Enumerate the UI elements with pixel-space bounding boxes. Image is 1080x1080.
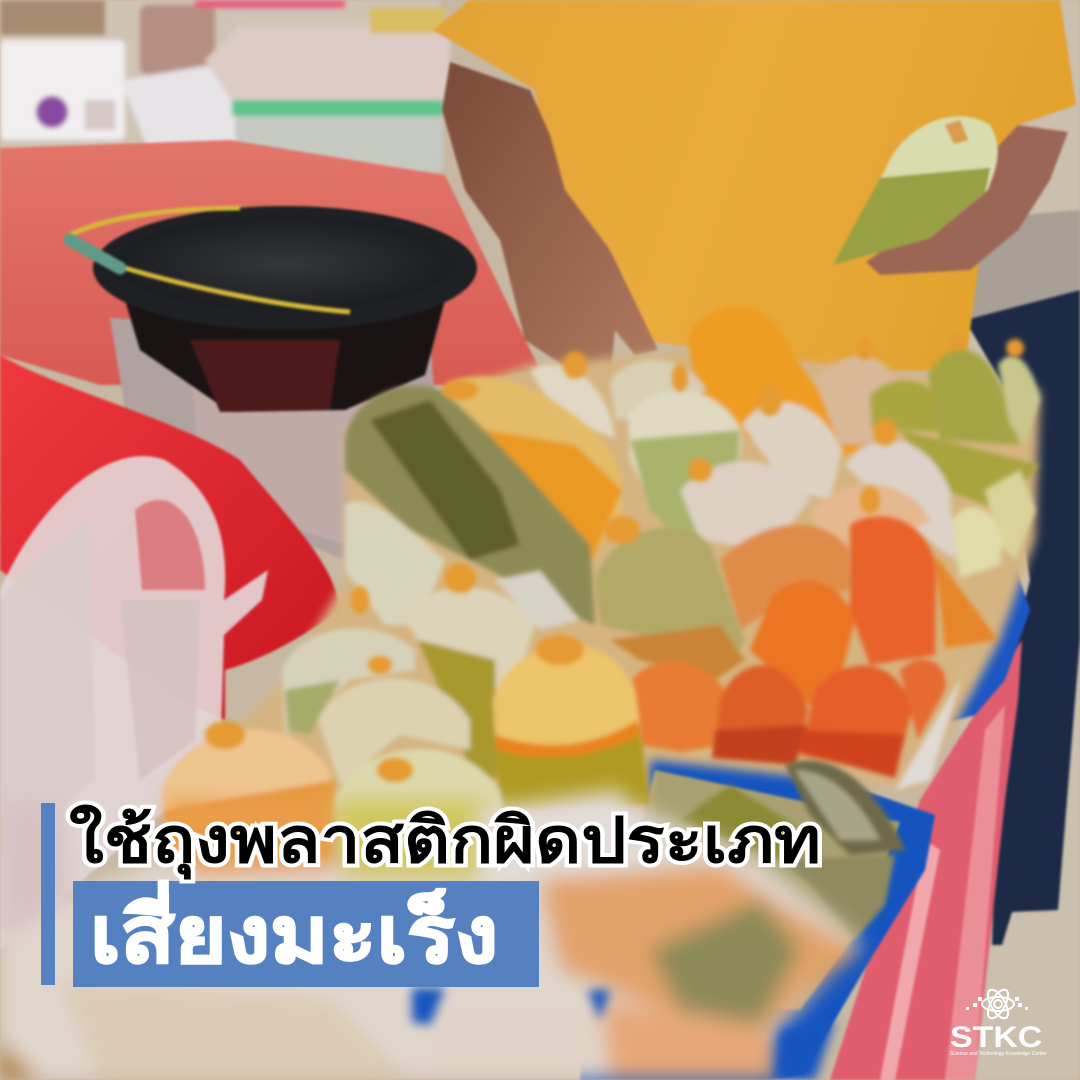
icon: atom xyxy=(966,988,1028,1020)
navy skirt xyxy=(965,290,1080,945)
white transparent plastic bag xyxy=(0,456,268,950)
black bucket on grey stand xyxy=(70,206,477,560)
STKC logo xyxy=(950,988,1047,1057)
bag held in hand xyxy=(833,116,998,265)
warm base filling gaps between the bags xyxy=(165,350,1040,870)
left forearm and hand xyxy=(442,62,658,385)
yellow shirt xyxy=(433,0,1076,372)
red tablecloth xyxy=(0,140,540,385)
green-and-orange curry bags, back row xyxy=(530,306,1040,630)
right forearm and hand xyxy=(866,125,1068,275)
blurred foreground bags at bottom xyxy=(0,790,860,1080)
highlight banner xyxy=(73,881,539,987)
heading line 1: ใช้ถุงพลาสติกผิดประเภท xyxy=(69,806,821,876)
logo wordmark: STKC xyxy=(950,1021,1042,1054)
red plastic bag xyxy=(0,355,338,720)
red chili curry bags xyxy=(632,516,998,790)
accent bar xyxy=(41,803,55,985)
front row bags xyxy=(162,570,905,940)
grey undershirt xyxy=(965,210,1080,320)
background goods on the table xyxy=(0,0,450,172)
logo tagline: Science and Technology Knowledge Center xyxy=(950,1051,1047,1057)
bag knots in orange xyxy=(205,334,1024,782)
large herb bag and orange bag, middle row xyxy=(345,376,745,680)
headline group xyxy=(41,800,822,987)
heading line 2: เสี่ยงมะเร็ง xyxy=(90,891,498,979)
blue tray and pink table xyxy=(410,565,1030,1080)
